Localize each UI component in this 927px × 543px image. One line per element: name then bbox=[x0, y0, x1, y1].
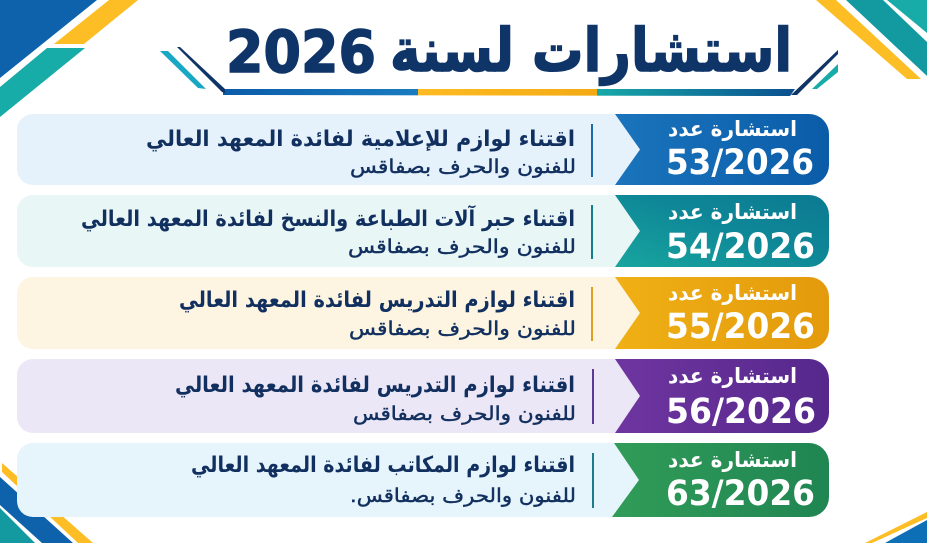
row 3 badge label bbox=[666, 281, 815, 347]
row 3 background panel bbox=[17, 277, 657, 349]
decoration: top right stripes bbox=[816, 0, 927, 79]
row 4 badge label: استشارة عدد bbox=[668, 364, 797, 388]
title bbox=[226, 16, 792, 86]
row 5 description bbox=[191, 453, 576, 507]
row 1 divider bbox=[591, 124, 593, 177]
decoration: bottom left stripes bbox=[0, 463, 93, 543]
row 2 description: للفنون والحرف بصفاقس bbox=[348, 236, 576, 258]
row 5 badge label: استشارة عدد bbox=[668, 448, 797, 472]
row 4 badge label bbox=[666, 364, 816, 432]
row 5 badge label: 63/2026 bbox=[666, 474, 815, 514]
row 1 badge label: استشارة عدد bbox=[668, 117, 797, 141]
row 5: consultation 63/2026 bbox=[17, 443, 829, 517]
row 2 description: اقتناء حبر آلات الطباعة والنسخ لفائدة المعهد العالي bbox=[81, 204, 575, 232]
row 1 description: للفنون والحرف بصفاقس bbox=[350, 156, 576, 178]
row 2 badge label bbox=[666, 200, 815, 267]
row 5 badge bbox=[612, 443, 829, 517]
row 5 description: للفنون والحرف بصفاقس. bbox=[350, 485, 576, 507]
row 3 badge label: 55/2026 bbox=[666, 307, 815, 347]
row 3 badge bbox=[615, 277, 829, 349]
row 4: consultation 56/2026 bbox=[17, 359, 829, 433]
row 3 description: اقتناء لوازم التدريس لفائدة المعهد العالي bbox=[179, 288, 575, 313]
row 5 background panel bbox=[17, 443, 657, 517]
row 4 divider bbox=[592, 369, 594, 424]
row 4 description: اقتناء لوازم التدريس لفائدة المعهد العالي bbox=[175, 373, 575, 398]
row 2 badge bbox=[615, 195, 829, 267]
decoration: top left stripes bbox=[0, 0, 138, 117]
row 1: consultation 53/2026 bbox=[17, 114, 829, 185]
row 3 divider bbox=[591, 287, 593, 341]
row 2: consultation 54/2026 bbox=[17, 195, 829, 267]
row 1 background panel bbox=[17, 114, 657, 185]
row 1 description bbox=[146, 127, 576, 178]
row 3 description bbox=[179, 288, 576, 340]
row 4 badge label: 56/2026 bbox=[666, 392, 816, 432]
row 5 description: اقتناء لوازم المكاتب لفائدة المعهد العالي bbox=[191, 453, 575, 478]
row 2 background panel bbox=[17, 195, 657, 267]
row 4 badge bbox=[615, 359, 829, 433]
row 1 badge label bbox=[666, 117, 814, 183]
row 1 badge label: 53/2026 bbox=[666, 143, 814, 183]
row 5 badge label bbox=[666, 448, 815, 514]
title: 2026 bbox=[226, 18, 376, 86]
row 4 background panel bbox=[17, 359, 657, 433]
title underline bbox=[160, 47, 838, 96]
row 2 badge label: استشارة عدد bbox=[668, 200, 797, 224]
row 3: consultation 55/2026 bbox=[17, 277, 829, 349]
row 1 badge bbox=[615, 114, 829, 185]
row 4 description bbox=[175, 373, 576, 425]
title: استشارات لسنة bbox=[390, 16, 792, 86]
row 1 description: اقتناء لوازم للإعلامية لفائدة المعهد العالي bbox=[146, 127, 575, 152]
row 3 badge label: استشارة عدد bbox=[668, 281, 797, 305]
row 3 description: للفنون والحرف بصفاقس bbox=[349, 318, 576, 340]
row 2 description bbox=[81, 204, 576, 258]
decoration: bottom right stripes bbox=[865, 512, 927, 543]
row 4 description: للفنون والحرف بصفاقس bbox=[353, 403, 576, 425]
row 2 badge label: 54/2026 bbox=[666, 227, 815, 267]
row 5 divider bbox=[592, 453, 594, 508]
row 2 divider bbox=[591, 205, 593, 259]
